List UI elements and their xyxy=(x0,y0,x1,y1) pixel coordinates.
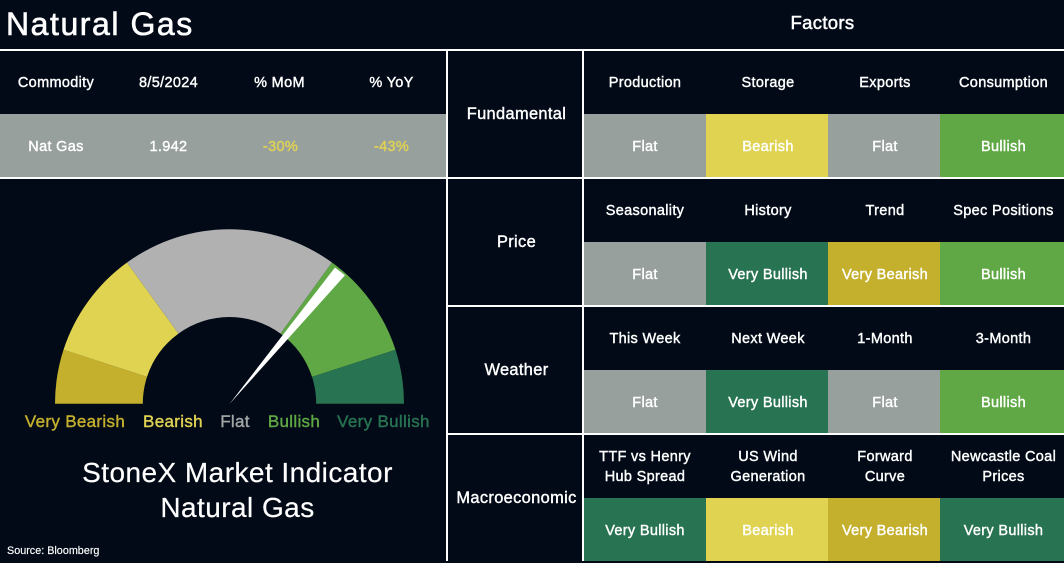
factor: 1-month: 1-Month xyxy=(857,330,913,346)
category label: Price xyxy=(497,233,536,251)
legend: very bullish: Very Bullish xyxy=(337,412,430,431)
panel: macroeconomic xyxy=(456,448,1064,561)
factor: forward curve xyxy=(857,448,913,484)
status: very bullish xyxy=(940,498,1064,561)
status: very bullish xyxy=(584,498,706,561)
status: very bearish xyxy=(828,242,940,305)
status: flat: Flat xyxy=(872,138,898,154)
status: very bullish xyxy=(706,370,828,433)
factor: exports: Exports xyxy=(859,74,911,90)
gauge segment: flat xyxy=(127,229,332,334)
status: bullish xyxy=(940,370,1064,433)
status: flat: Flat xyxy=(632,266,658,282)
panel: fundamental xyxy=(467,74,1064,177)
panel: weather xyxy=(484,330,1064,433)
status: flat xyxy=(828,114,940,177)
gauge chart xyxy=(55,229,404,404)
status: bullish: Bullish xyxy=(981,138,1026,154)
status: very bullish: Very Bullish xyxy=(728,394,808,410)
gauge segment: bullish xyxy=(280,262,396,377)
factor: consumption: Consumption xyxy=(959,74,1048,90)
factor: newcastle coal prices: Newcastle Coal xyxy=(951,448,1056,464)
month over month change: -30% xyxy=(263,138,298,154)
status: very bullish xyxy=(706,242,828,305)
category label: Weather xyxy=(484,361,549,379)
status: very bullish: Very Bullish xyxy=(964,522,1043,538)
factor: seasonality: Seasonality xyxy=(606,202,684,218)
factor: newcastle coal prices xyxy=(951,448,1056,484)
status: bearish: Bearish xyxy=(742,522,794,538)
status: flat xyxy=(584,242,706,305)
factors heading: Factors xyxy=(791,12,854,33)
indicator title: StoneX Market Indicator xyxy=(82,457,393,488)
status: flat: Flat xyxy=(872,394,898,410)
factor: storage: Storage xyxy=(741,74,795,90)
category label: Macroeconomic xyxy=(456,489,577,507)
title: Natural Gas xyxy=(6,6,194,42)
factor: forward curve: Curve xyxy=(865,468,905,484)
gauge segment: very bearish xyxy=(55,350,147,404)
factor: forward curve: Forward xyxy=(857,448,913,464)
gauge segment: very bullish xyxy=(312,350,404,404)
status: flat xyxy=(828,370,940,433)
category label: Fundamental xyxy=(467,105,566,123)
source note: Source: Bloomberg xyxy=(7,545,99,557)
legend: very bearish: Very Bearish xyxy=(25,412,125,431)
status: flat: Flat xyxy=(632,394,658,410)
gauge segment: bearish xyxy=(64,262,178,377)
status: very bullish: Very Bullish xyxy=(605,522,685,538)
data row background xyxy=(0,114,446,177)
status: bullish xyxy=(940,242,1064,305)
status: bullish xyxy=(940,114,1064,177)
factor: ttf vs henry hub spread: TTF vs Henry xyxy=(599,448,691,464)
factor: next week: Next Week xyxy=(731,330,805,346)
factor: production: Production xyxy=(609,74,681,90)
factor: newcastle coal prices: Prices xyxy=(982,468,1025,484)
indicator title: Natural Gas xyxy=(160,492,315,523)
status: flat: Flat xyxy=(632,138,658,154)
status: very bearish xyxy=(828,498,940,561)
status: bearish xyxy=(706,114,828,177)
status: bullish: Bullish xyxy=(981,266,1026,282)
factor: trend: Trend xyxy=(866,202,904,218)
commodity name: Nat Gas xyxy=(28,138,84,154)
factor: us wind generation: Generation xyxy=(731,468,805,484)
commodity table xyxy=(0,74,446,177)
legend: bullish: Bullish xyxy=(268,412,320,431)
price value: 1.942 xyxy=(150,138,187,154)
factor: history: History xyxy=(744,202,792,218)
panel: price xyxy=(497,202,1064,305)
status: very bearish: Very Bearish xyxy=(842,522,928,538)
factor: 3-month: 3-Month xyxy=(976,330,1031,346)
status: very bearish: Very Bearish xyxy=(842,266,928,282)
status: very bullish: Very Bullish xyxy=(728,266,808,282)
status: bullish: Bullish xyxy=(981,394,1026,410)
legend: bearish: Bearish xyxy=(143,412,203,431)
status: bearish: Bearish xyxy=(742,138,794,154)
factor: us wind generation xyxy=(731,448,805,484)
status: bearish xyxy=(706,498,828,561)
column header: date: 8/5/2024 xyxy=(139,74,198,90)
column header: month over month: % MoM xyxy=(254,74,305,90)
factor: this week: This Week xyxy=(609,330,681,346)
status: flat xyxy=(584,114,706,177)
factor: ttf vs henry hub spread: Hub Spread xyxy=(605,468,685,484)
gauge legend xyxy=(24,412,430,431)
factor: us wind generation: US Wind xyxy=(738,448,798,464)
factor: spec positions: Spec Positions xyxy=(953,202,1054,218)
indicator title xyxy=(82,457,393,523)
legend: flat: Flat xyxy=(220,412,250,431)
column header: year over year: % YoY xyxy=(369,74,414,90)
gauge needle xyxy=(230,268,345,404)
status: flat xyxy=(584,370,706,433)
year over year change: -43% xyxy=(374,138,409,154)
column header: commodity: Commodity xyxy=(18,74,94,90)
factor: ttf vs henry hub spread xyxy=(599,448,691,484)
